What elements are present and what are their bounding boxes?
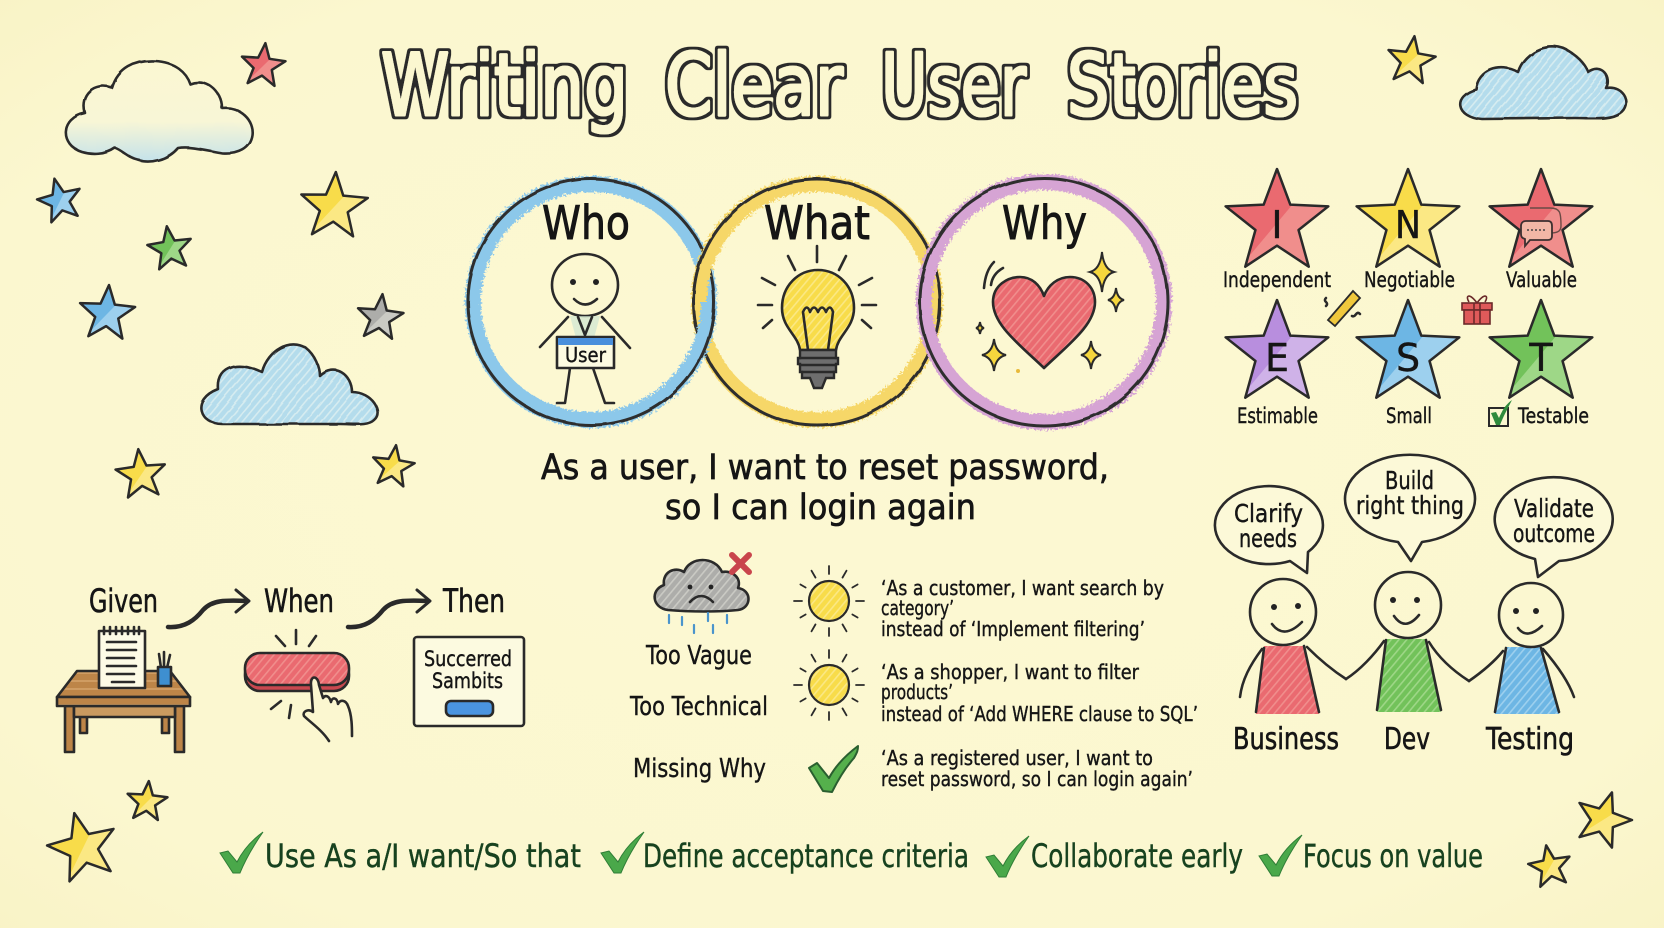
title: User <box>881 36 1026 136</box>
icon: sad rain cloud <box>655 555 749 633</box>
check item: collaborate early <box>986 836 1243 877</box>
ring: why <box>920 178 1168 426</box>
panel: who what why rings <box>468 178 1168 426</box>
speech bubble: validate outcome <box>1495 477 1613 577</box>
title: Writing <box>381 36 628 136</box>
arrow: given to when <box>168 590 249 627</box>
ring overlap: who passes in front of what <box>680 302 718 390</box>
label: too vague: Too Vague <box>645 641 752 671</box>
check item: focus on value <box>1259 835 1483 876</box>
label: too technical: Too Technical <box>629 692 768 722</box>
panel: given when then <box>57 582 524 752</box>
star: N negotiable: N <box>1395 203 1421 247</box>
figure: business <box>1240 579 1346 714</box>
star: S small: S <box>1396 336 1420 380</box>
star: yellow bottom left small <box>126 779 169 821</box>
text: example two: ‘As a shopper, I want to filter <box>881 660 1139 684</box>
label: when: When <box>264 582 334 620</box>
star: E estimable <box>1226 300 1328 428</box>
speech bubble: build right thing <box>1345 455 1475 561</box>
panel: team collaboration <box>1215 455 1613 757</box>
star: V valuable with chat icon <box>1490 169 1592 292</box>
speech bubble: build right thing: right thing <box>1356 491 1464 520</box>
speech bubble: clarify needs <box>1215 486 1323 573</box>
star: large yellow <box>299 170 369 237</box>
star: N negotiable: Negotiable <box>1364 268 1455 292</box>
title <box>381 36 1298 136</box>
text: example two: instead of ‘Add WHERE clause to SQL’ <box>881 702 1198 726</box>
star: T testable with checkbox <box>1489 300 1592 428</box>
star: E estimable: E <box>1265 336 1289 380</box>
star: T testable with checkbox: Testable <box>1517 404 1589 428</box>
checklist footer <box>220 832 1483 877</box>
star: S small: Small <box>1386 404 1432 428</box>
text: example two: products’ <box>881 680 953 704</box>
label: missing why: Missing Why <box>633 754 766 784</box>
speech bubble: clarify needs: needs <box>1239 524 1297 553</box>
decorative clouds <box>66 47 1626 424</box>
icon: sun one <box>794 566 864 636</box>
heading: what: What <box>764 196 870 250</box>
label: business: Business <box>1233 722 1339 757</box>
heading: who: Who <box>542 196 630 250</box>
text: example two <box>881 660 1198 726</box>
check item: focus on value: Focus on value <box>1303 837 1483 875</box>
star: I independent: Independent <box>1223 268 1331 292</box>
ring: what <box>694 179 940 425</box>
speech bubble: build right thing: Build <box>1385 466 1434 495</box>
icon: green check <box>809 746 858 792</box>
star: yellow top right <box>1385 33 1438 84</box>
star: I independent <box>1223 169 1331 292</box>
text: example one <box>881 576 1164 641</box>
star: yellow bottom right small <box>1526 842 1574 888</box>
star: yellow lower left <box>114 447 168 499</box>
star: yellow lower middle <box>370 442 417 488</box>
user story sentence: so I can login again <box>665 488 976 528</box>
star: E estimable: Estimable <box>1237 404 1318 428</box>
speech bubble: validate outcome: outcome <box>1513 519 1595 548</box>
speech bubble: clarify needs: Clarify <box>1234 499 1303 528</box>
star: green <box>145 223 194 270</box>
star: T testable with checkbox: T <box>1528 336 1553 380</box>
icon: gift <box>1462 296 1492 324</box>
icon: heart with sparkles <box>976 252 1124 373</box>
icon: red button and pressing hand <box>245 630 352 741</box>
star: N negotiable <box>1357 169 1459 292</box>
speech bubble: validate outcome: Validate <box>1514 494 1594 523</box>
star: small blue <box>33 173 86 224</box>
text: example one: category’ <box>881 596 954 620</box>
text: example three <box>881 746 1193 791</box>
star: V valuable with chat icon: Valuable <box>1506 268 1577 292</box>
label: testing: Testing <box>1485 722 1574 757</box>
icon: success dialog: Succerred <box>424 647 512 671</box>
label: then: Then <box>442 582 505 620</box>
panel: common pitfalls <box>629 555 1198 792</box>
user story sentence <box>541 448 1109 528</box>
figure: dev <box>1346 572 1469 712</box>
icon: success dialog: Sambits <box>432 669 503 693</box>
star: grey <box>355 292 405 340</box>
check item: use as a <box>220 832 581 875</box>
check item: collaborate early: Collaborate early <box>1031 837 1243 875</box>
icon: user figure with badge: User <box>565 343 607 367</box>
title: Clear <box>665 36 843 136</box>
label: dev: Dev <box>1384 722 1430 757</box>
arrow: when to then <box>348 590 430 627</box>
text: example three: ‘As a registered user, I want to <box>881 746 1153 770</box>
icon: ruler <box>1325 291 1360 326</box>
star: S small <box>1357 300 1459 428</box>
ring: who <box>468 179 714 425</box>
heading: why: Why <box>1002 196 1087 250</box>
icon: user figure with badge <box>540 254 630 403</box>
check item: use as a: Use As a/I want/So that <box>265 837 581 875</box>
star: red <box>239 41 287 87</box>
star: yellow bottom right large <box>1570 784 1638 851</box>
label: given: Given <box>89 582 158 620</box>
check item: define acceptance criteria <box>601 832 969 875</box>
text: example one: ‘As a customer, I want search by <box>881 576 1164 600</box>
figure: testing <box>1469 583 1574 714</box>
text: example one: instead of ‘Implement filtering’ <box>881 617 1145 641</box>
star: I independent: I <box>1271 203 1283 247</box>
icon: success dialog <box>414 637 524 726</box>
icon: desk with notepad <box>57 627 190 752</box>
icon: light bulb <box>758 246 876 388</box>
panel: invest stars <box>1223 169 1592 428</box>
cloud: middle left <box>201 344 378 424</box>
cloud: top left <box>66 61 252 162</box>
user story sentence: As a user, I want to reset password, <box>541 448 1109 488</box>
star: blue <box>78 283 137 339</box>
title: Stories <box>1067 36 1298 136</box>
cloud: top right <box>1460 47 1626 119</box>
check item: define acceptance criteria: Define acceptance criteria <box>643 837 969 875</box>
icon: sun two <box>794 650 864 720</box>
text: example three: reset password, so I can login again’ <box>881 767 1193 791</box>
star: yellow bottom left large <box>41 805 123 885</box>
